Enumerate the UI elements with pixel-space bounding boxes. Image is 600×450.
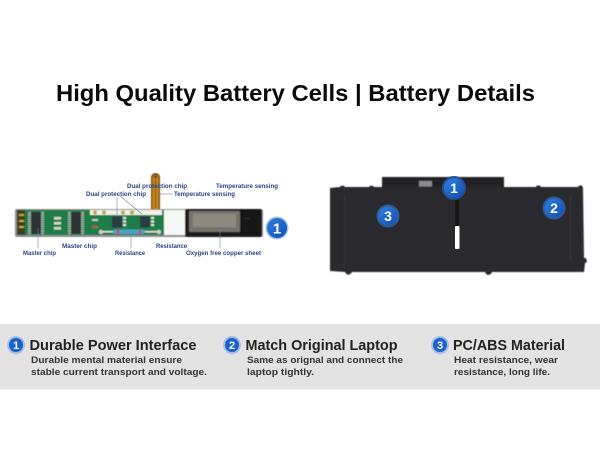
- component labels: Dual protection chip: [127, 183, 187, 190]
- feature 2: match original laptop: Match Original Laptop: [246, 337, 398, 354]
- feature 1: durable power interface: [7, 336, 207, 378]
- feature 2: match original laptop: laptop tightly.: [247, 367, 314, 378]
- feature 2: match original laptop: [223, 336, 403, 378]
- feature 3: pc/abs material: [431, 336, 565, 378]
- feature 1: durable power interface: 1: [13, 340, 19, 352]
- feature 2: match original laptop: Same as orignal and connect the: [247, 355, 403, 366]
- panel: battery photo: [330, 176, 587, 275]
- badge 3 on battery: [376, 204, 400, 228]
- temperature sensor ribbon: [151, 173, 160, 213]
- callout lines: [38, 194, 220, 248]
- component labels: Master chip: [62, 243, 97, 250]
- component labels: Oxygen free copper sheet: [186, 250, 262, 257]
- panel: feature strip: [0, 324, 600, 390]
- badge 1 on battery: [442, 176, 466, 200]
- protection board: [15, 209, 263, 237]
- feature 2: match original laptop: 2: [229, 340, 235, 352]
- feature 3: pc/abs material: Heat resistance, wear: [454, 355, 558, 366]
- badge 1 on battery: 1: [450, 180, 458, 196]
- component labels: Temperature sensing: [174, 191, 235, 198]
- title: High Quality Battery Cells | Battery Details: [56, 80, 535, 106]
- feature 1: durable power interface: Durable mental material ensure: [31, 355, 182, 366]
- feature 3: pc/abs material: 3: [437, 340, 443, 352]
- badge 2 on battery: 2: [550, 200, 558, 216]
- badge 3 on battery: 3: [384, 208, 392, 224]
- badge 1: interface: [266, 216, 288, 240]
- component labels: Resistance: [156, 243, 187, 250]
- feature 1: durable power interface: Durable Power Interface: [30, 337, 196, 354]
- badge 1: interface: 1: [273, 220, 281, 238]
- component labels: Dual protection chip: [86, 191, 146, 198]
- charging slot: [455, 226, 460, 249]
- battery body: [330, 177, 587, 275]
- component labels: Temperature sensing: [216, 183, 278, 190]
- component labels: Resistance: [115, 250, 145, 257]
- badge 2 on battery: [542, 196, 566, 220]
- feature 3: pc/abs material: PC/ABS Material: [453, 337, 565, 354]
- feature 1: durable power interface: stable current transport and voltage.: [31, 367, 207, 378]
- panel: circuit board diagram: [15, 173, 288, 257]
- feature 3: pc/abs material: resistance, long life.: [454, 367, 550, 378]
- component labels: [23, 183, 278, 257]
- component labels: Master chip: [23, 250, 56, 257]
